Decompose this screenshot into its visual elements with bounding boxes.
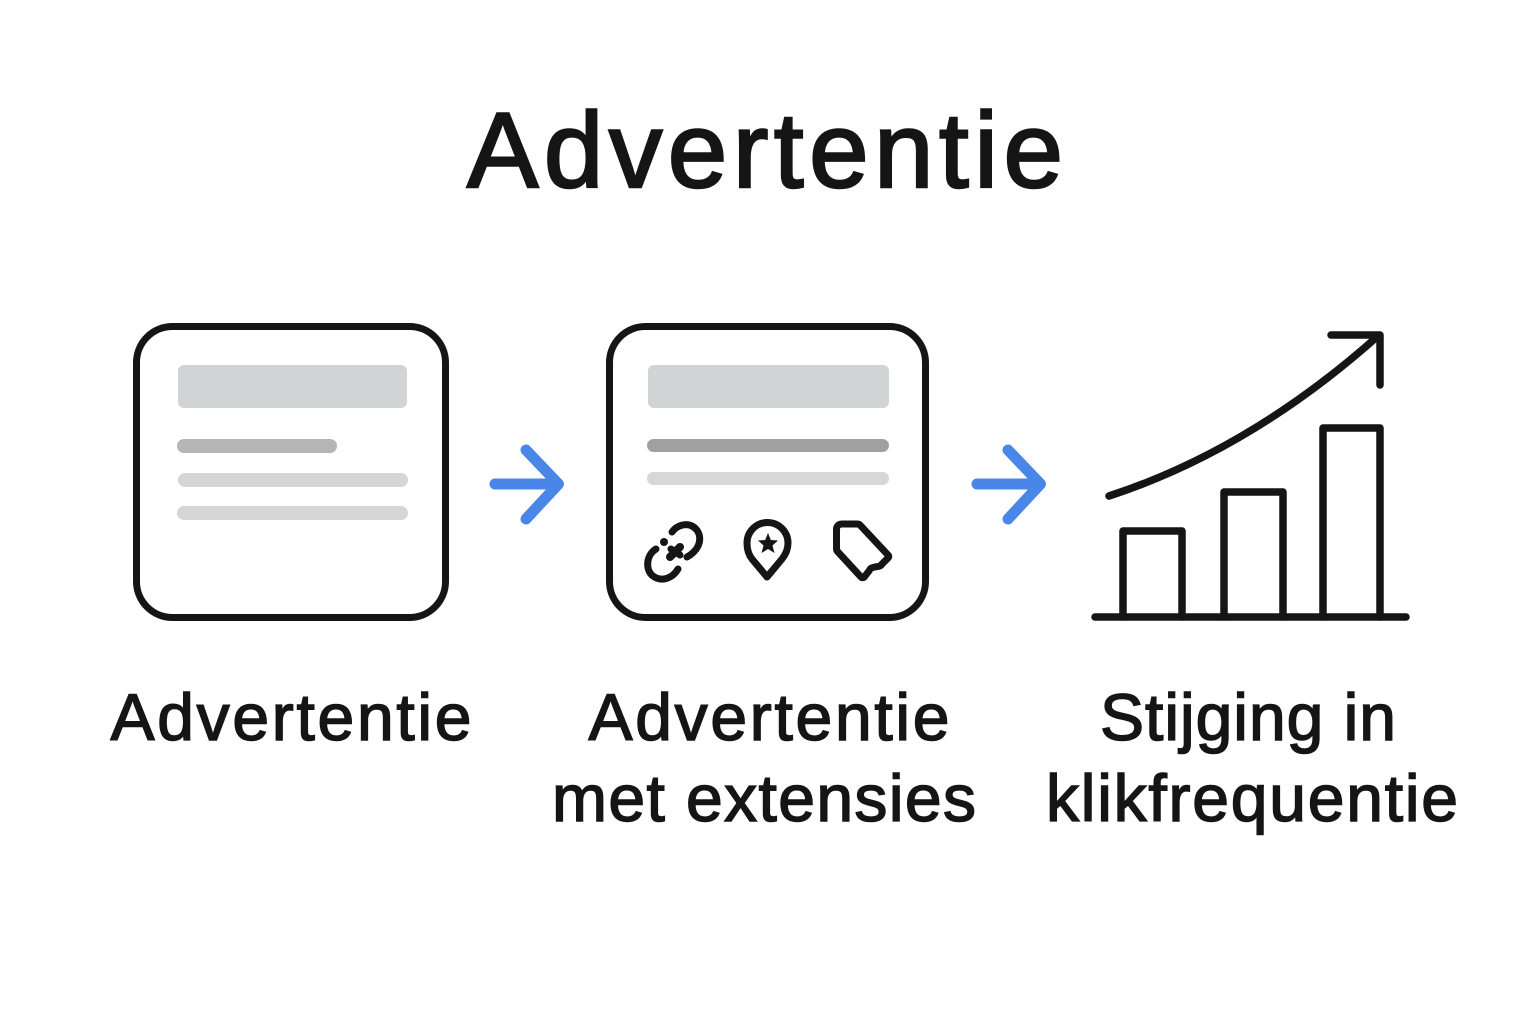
label: click-through increase: klikfrequentie xyxy=(1046,761,1458,835)
icon: price tag xyxy=(836,524,889,578)
trend arrow xyxy=(1109,335,1380,496)
arrow: to click-through growth xyxy=(977,450,1040,519)
bar: small xyxy=(1123,531,1182,617)
icon: location pin with star xyxy=(747,522,788,577)
label: click-through increase xyxy=(1046,680,1458,835)
chart: rising bars with trend arrow xyxy=(1095,335,1406,617)
label: click-through increase: Stijging in xyxy=(1100,680,1396,754)
label: ad with extensions xyxy=(552,680,976,835)
panel: plain ad card xyxy=(136,326,446,618)
arrow: to ad with extensions xyxy=(495,450,558,519)
label: ad with extensions: met extensies xyxy=(552,761,976,835)
label: ad with extensions: Advertentie xyxy=(588,680,950,754)
title: Advertentie xyxy=(467,90,1063,210)
label: plain ad: Advertentie xyxy=(110,680,472,754)
panel: ad card with extensions xyxy=(610,326,926,618)
icon: link xyxy=(648,525,700,579)
bar: large xyxy=(1323,428,1380,617)
bar: medium xyxy=(1224,492,1283,617)
